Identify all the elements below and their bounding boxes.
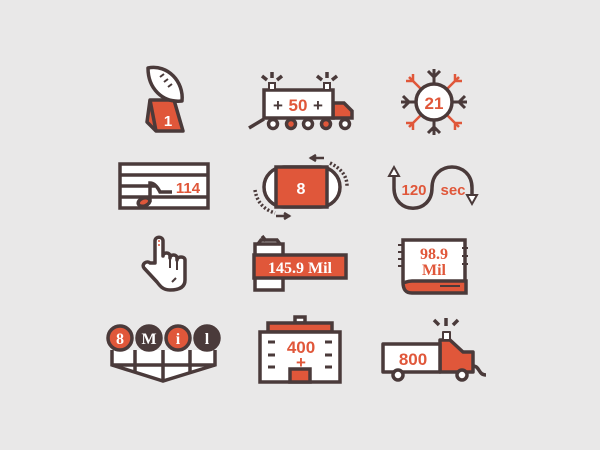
- icon: can 145.9 Mil: [254, 236, 346, 290]
- icon: book 98.9 Mil: [398, 240, 468, 293]
- icon: building 400+: +: [296, 353, 306, 372]
- icon: building 400+: 400: [287, 338, 315, 357]
- icon: 8 Mile sign: 8: [116, 331, 124, 348]
- icon: snowflake 21: [401, 69, 467, 135]
- icon: parade truck +50: [249, 72, 352, 128]
- icon: trophy football: [147, 67, 183, 131]
- icon: trophy football: 1: [164, 113, 172, 130]
- icon: hand one finger: [143, 237, 185, 290]
- icon: 120 sec curve: 120: [401, 182, 427, 199]
- icon: book 98.9 Mil: Mil: [422, 262, 447, 279]
- icon: football field 8: [255, 155, 347, 219]
- icon: can 145.9 Mil: 145.9 Mil: [268, 260, 333, 277]
- icon: parade truck +50: 50: [289, 96, 307, 115]
- icon: 8 Mile sign: M: [141, 331, 157, 348]
- icon: parade truck +50: +: [313, 96, 323, 115]
- icon: 120 sec curve: [389, 167, 477, 208]
- icon: 120 sec curve: sec: [440, 182, 466, 199]
- icon: 8 Mile sign: i: [176, 331, 181, 348]
- icon: book 98.9 Mil: 98.9: [420, 246, 448, 263]
- icon: building 400+: [260, 317, 340, 382]
- icon: music staff 114: [120, 164, 208, 208]
- icon: football field 8: 8: [297, 181, 306, 198]
- icon: truck 800: [383, 318, 486, 380]
- icon: 8 Mile sign: [108, 326, 219, 381]
- icon: snowflake 21: 21: [425, 94, 443, 113]
- icon: truck 800: 800: [399, 350, 427, 369]
- icon: 8 Mile sign: l: [205, 331, 210, 348]
- icon: music staff 114: 114: [176, 180, 201, 197]
- icon: parade truck +50: +: [273, 96, 283, 115]
